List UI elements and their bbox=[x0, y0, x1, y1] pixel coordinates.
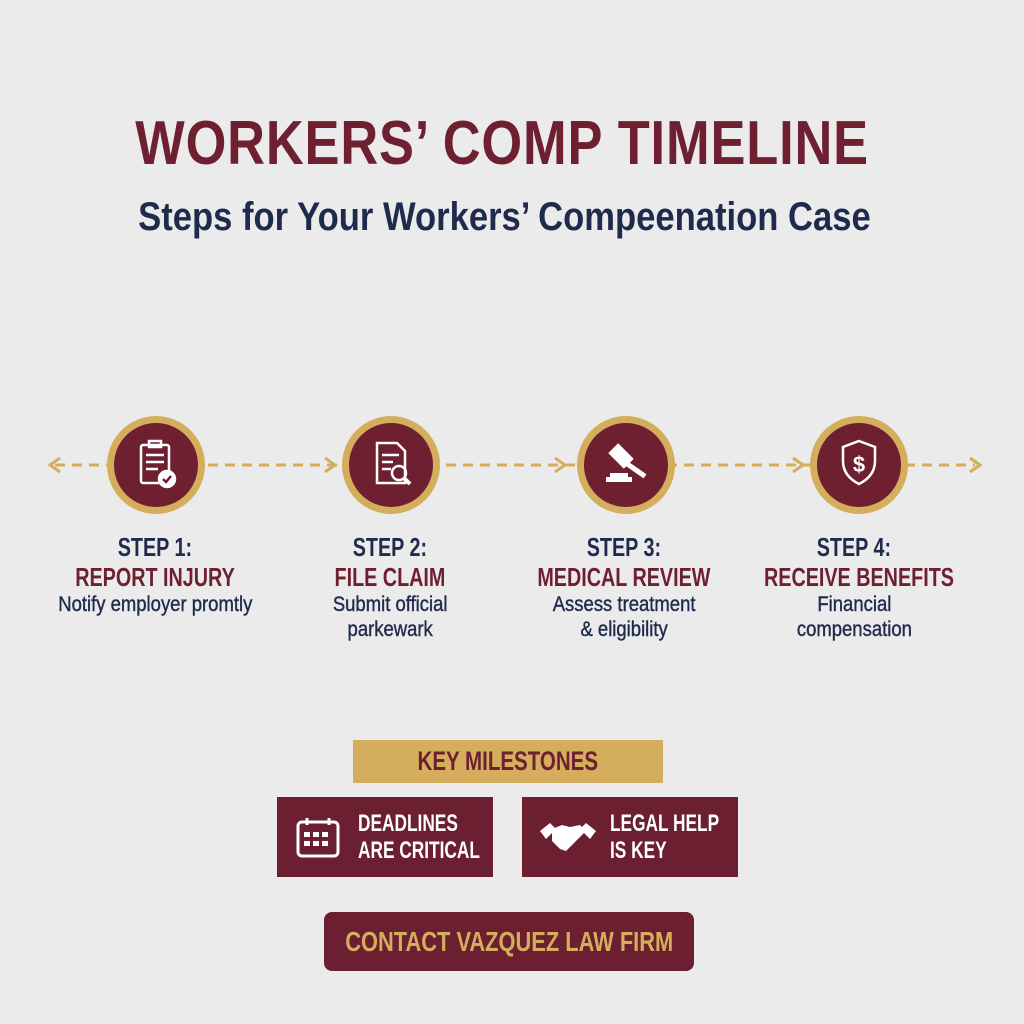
step 1 text: STEP 1: bbox=[118, 532, 192, 562]
panel: legal help bbox=[522, 797, 738, 877]
panel: deadlines bbox=[277, 797, 493, 877]
step 3 text bbox=[537, 532, 711, 641]
subtitle: Steps for Your Workers’ Compeenation Case bbox=[138, 195, 870, 239]
icon: shield dollar bbox=[810, 416, 908, 514]
step 4 text: compensation bbox=[796, 618, 912, 641]
step 2 text: FILE CLAIM bbox=[335, 562, 445, 592]
step 2 text: Submit official bbox=[333, 593, 447, 616]
step 3 text: STEP 3: bbox=[587, 532, 661, 562]
call to action button bbox=[324, 912, 694, 971]
icon: clipboard bbox=[107, 416, 205, 514]
icon: shield dollar: $ bbox=[853, 452, 865, 477]
step 4 text: Financial bbox=[817, 593, 891, 616]
icon: calendar bbox=[296, 818, 340, 858]
step 3 text: Assess treatment bbox=[553, 593, 695, 616]
step 1 text: REPORT INJURY bbox=[75, 562, 235, 592]
step 2 text: parkewark bbox=[347, 618, 433, 641]
key milestones heading: KEY MILESTONES bbox=[418, 746, 598, 776]
arrow: timeline dashed line bbox=[48, 456, 982, 474]
step 1 text bbox=[58, 532, 252, 616]
panel: deadlines: ARE CRITICAL bbox=[358, 837, 480, 864]
icon: document search bbox=[342, 416, 440, 514]
key milestones heading bbox=[353, 740, 663, 783]
step 2 text: STEP 2: bbox=[353, 532, 427, 562]
title: WORKERS’ COMP TIMELINE bbox=[135, 109, 869, 178]
step 3 text: & eligibility bbox=[580, 618, 668, 641]
step 4 text: RECEIVE BENEFITS bbox=[764, 562, 954, 592]
panel: legal help: LEGAL HELP bbox=[610, 810, 719, 837]
step 4 text: STEP 4: bbox=[817, 532, 891, 562]
panel: legal help: IS KEY bbox=[610, 837, 667, 864]
icon: gavel bbox=[577, 416, 675, 514]
step 4 text bbox=[764, 532, 954, 641]
step 2 text bbox=[333, 532, 447, 641]
icon: handshake bbox=[540, 823, 596, 851]
step 3 text: MEDICAL REVIEW bbox=[537, 562, 711, 592]
call to action button: CONTACT VAZQUEZ LAW FIRM bbox=[345, 926, 673, 956]
step 1 text: Notify employer promtly bbox=[58, 593, 252, 616]
panel: deadlines: DEADLINES bbox=[358, 810, 458, 837]
